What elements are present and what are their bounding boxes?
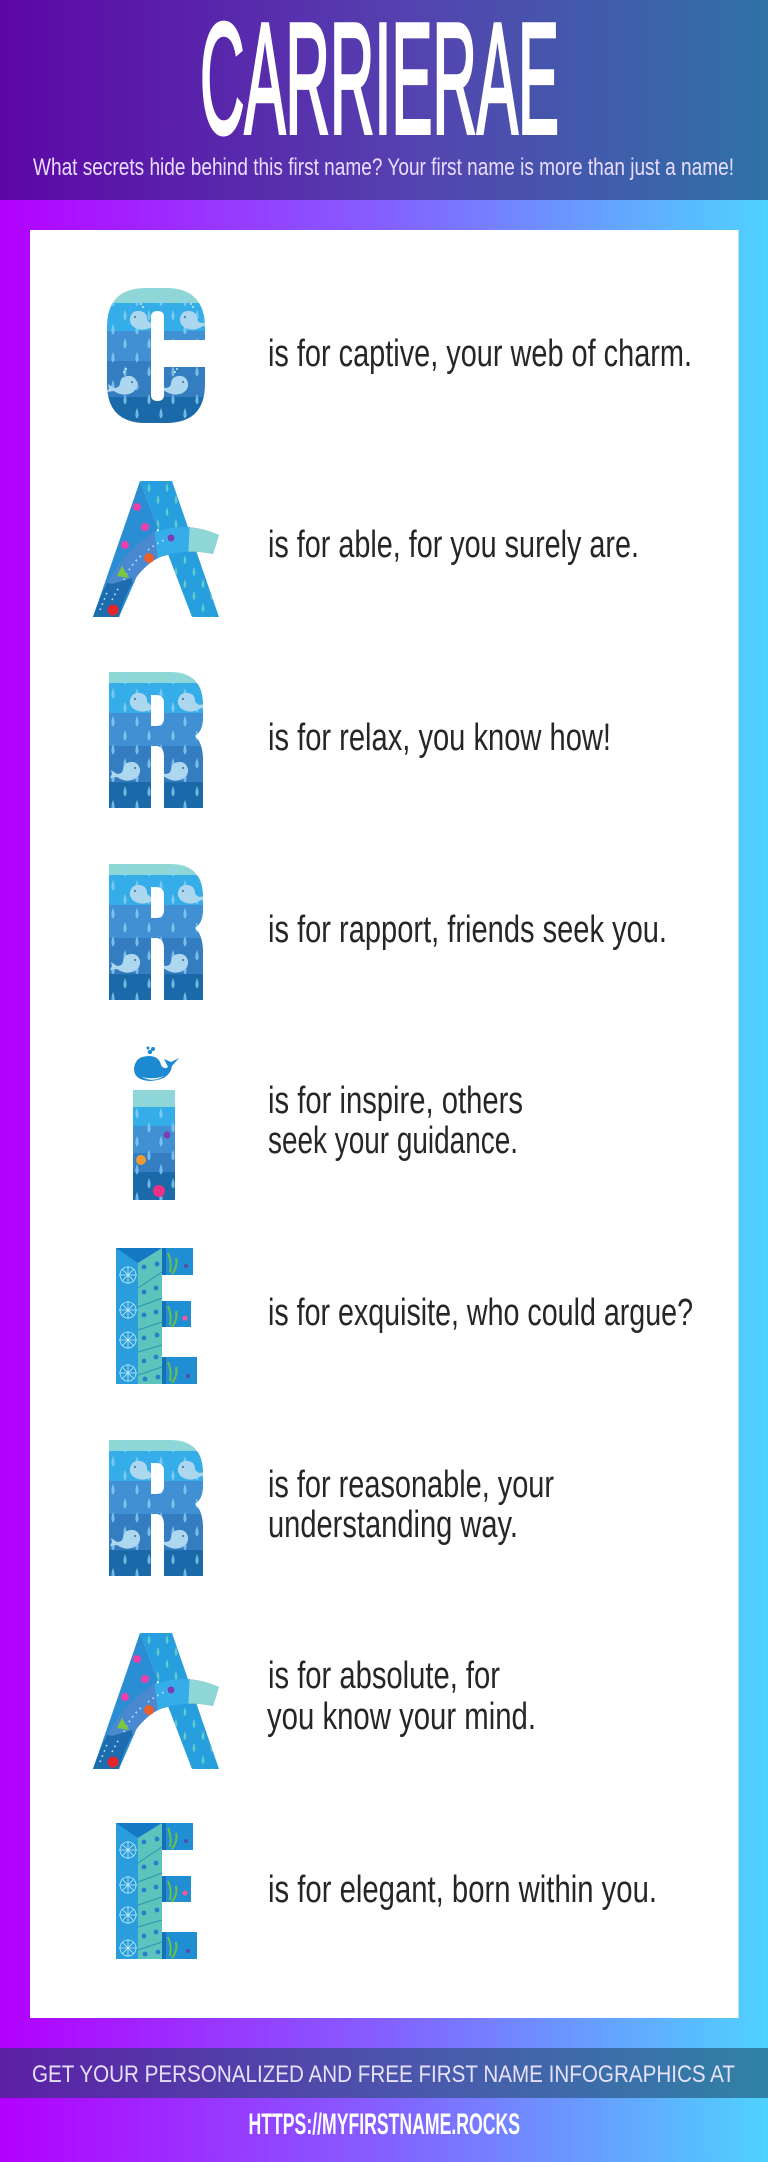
icon: letter R <box>109 672 208 808</box>
icon: letter A <box>90 481 225 620</box>
panel: white content card <box>30 230 738 2018</box>
footer band <box>0 2048 768 2098</box>
text: A line: is for able, for you surely are. <box>268 524 639 566</box>
footer url: HTTPS://MYFIRSTNAME.ROCKS <box>248 2108 520 2141</box>
text: third R lines: is for reasonable, your <box>268 1464 554 1506</box>
icon: letter C <box>107 288 210 423</box>
icon: letter A second <box>90 1633 225 1772</box>
text: R line: is for relax, you know how! <box>268 717 611 759</box>
icon: letter E second <box>116 1823 197 1959</box>
text: second A lines <box>267 1655 536 1738</box>
header band <box>0 0 768 200</box>
text: third R lines <box>268 1464 554 1546</box>
icon: letter E <box>116 1248 197 1384</box>
icon: letter I with whale <box>133 1046 179 1200</box>
text: second A lines: is for absolute, for <box>268 1655 500 1697</box>
text: second A lines: you know your mind. <box>267 1696 536 1738</box>
text: third R lines: understanding way. <box>268 1504 518 1546</box>
text: I lines <box>268 1080 523 1162</box>
icon: letter R second <box>109 864 208 1000</box>
text: I lines: is for inspire, others <box>268 1080 523 1122</box>
text: second E line: is for elegant, born within you. <box>268 1869 657 1911</box>
text: I lines: seek your guidance. <box>268 1120 518 1162</box>
icon: letter R third <box>109 1440 208 1576</box>
